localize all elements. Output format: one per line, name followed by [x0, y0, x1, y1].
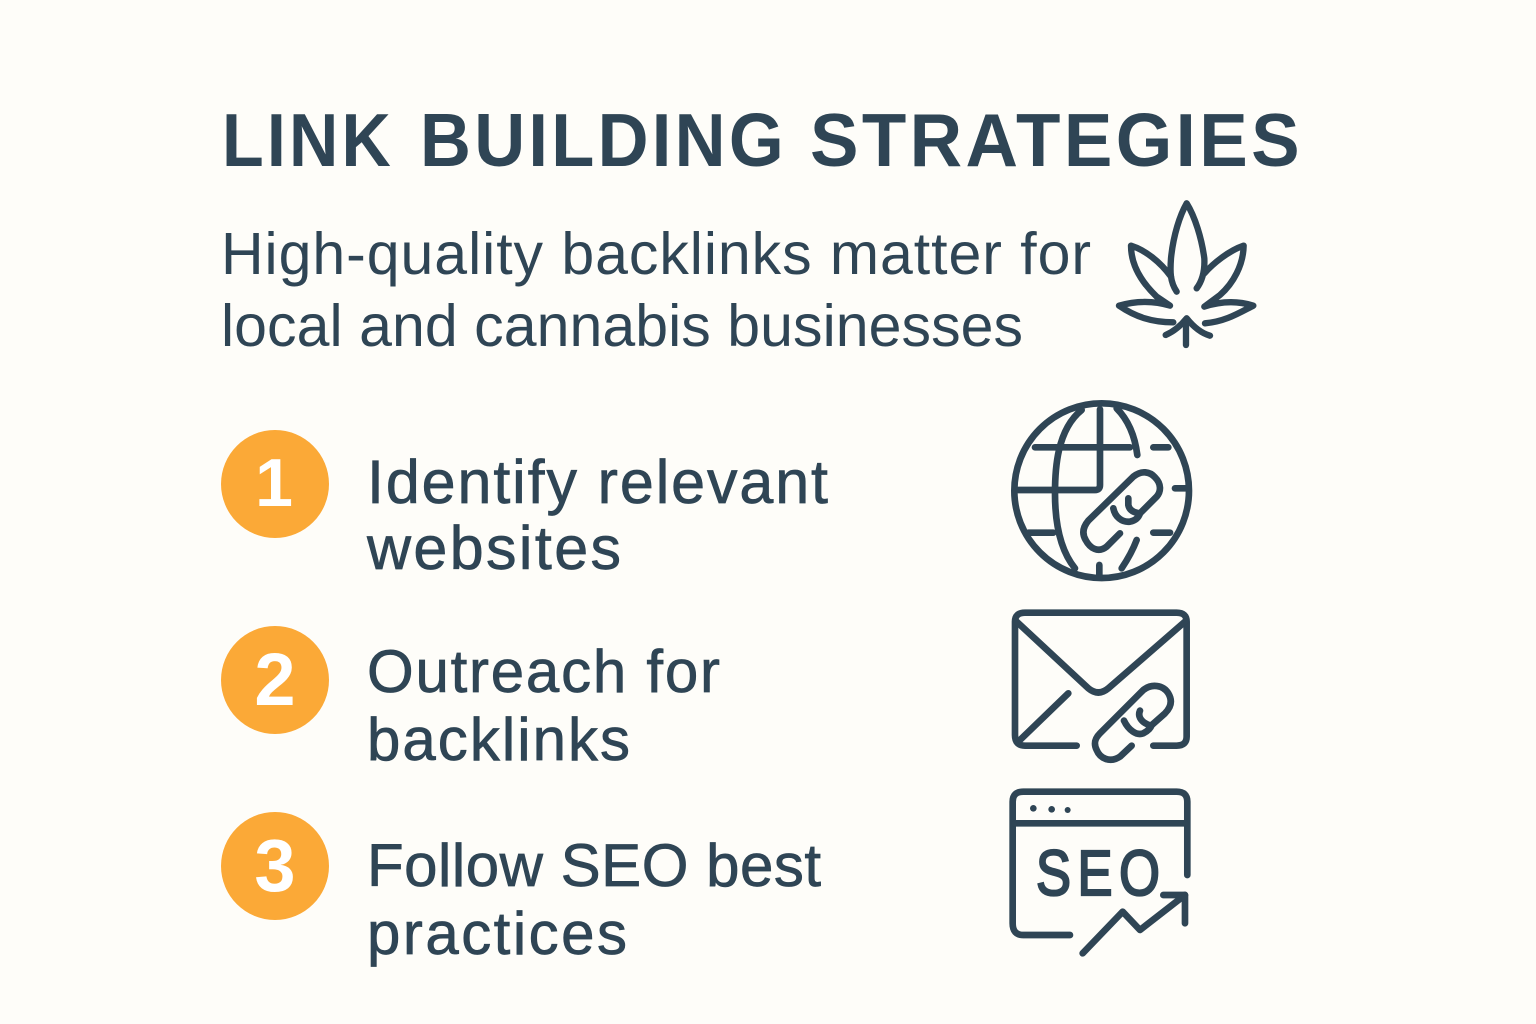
title: STRATEGIES: [810, 98, 1303, 182]
icon: cannabis leaf: [1119, 203, 1253, 345]
icon: globe with link: [1014, 403, 1189, 578]
step 2 label: backlinks: [367, 706, 630, 773]
step 1 label: [366, 448, 828, 582]
title: LINK: [222, 98, 394, 182]
subtitle text block: High-quality backlinks matter for: [221, 221, 1091, 287]
SEO wordmark: SEO: [1036, 838, 1166, 909]
step 3: [221, 812, 821, 967]
step 1: [221, 430, 828, 582]
number badge 1: 1: [255, 445, 293, 521]
number badge 3: [221, 812, 329, 920]
number badge 3: 3: [254, 824, 296, 907]
step 3 label: Follow SEO best: [367, 832, 821, 899]
step 3 label: [367, 832, 821, 967]
number badge 1: [221, 430, 329, 538]
subtitle text block: local and cannabis businesses: [221, 293, 1023, 359]
step 3 label: practices: [367, 900, 627, 967]
number badge 2: 2: [254, 638, 296, 721]
number badge 2: [221, 626, 329, 734]
subtitle text block: [221, 221, 1091, 359]
icon: SEO browser window with growth arrow: [1013, 792, 1187, 953]
step 2: [221, 626, 720, 773]
step 2 label: [367, 638, 720, 773]
step 2 label: Outreach for: [367, 638, 720, 705]
icon: envelope with link: [1015, 613, 1187, 760]
title: [222, 98, 1303, 182]
step 1 label: websites: [366, 514, 621, 582]
step 1 label: Identify relevant: [367, 448, 828, 516]
title: BUILDING: [420, 98, 787, 182]
